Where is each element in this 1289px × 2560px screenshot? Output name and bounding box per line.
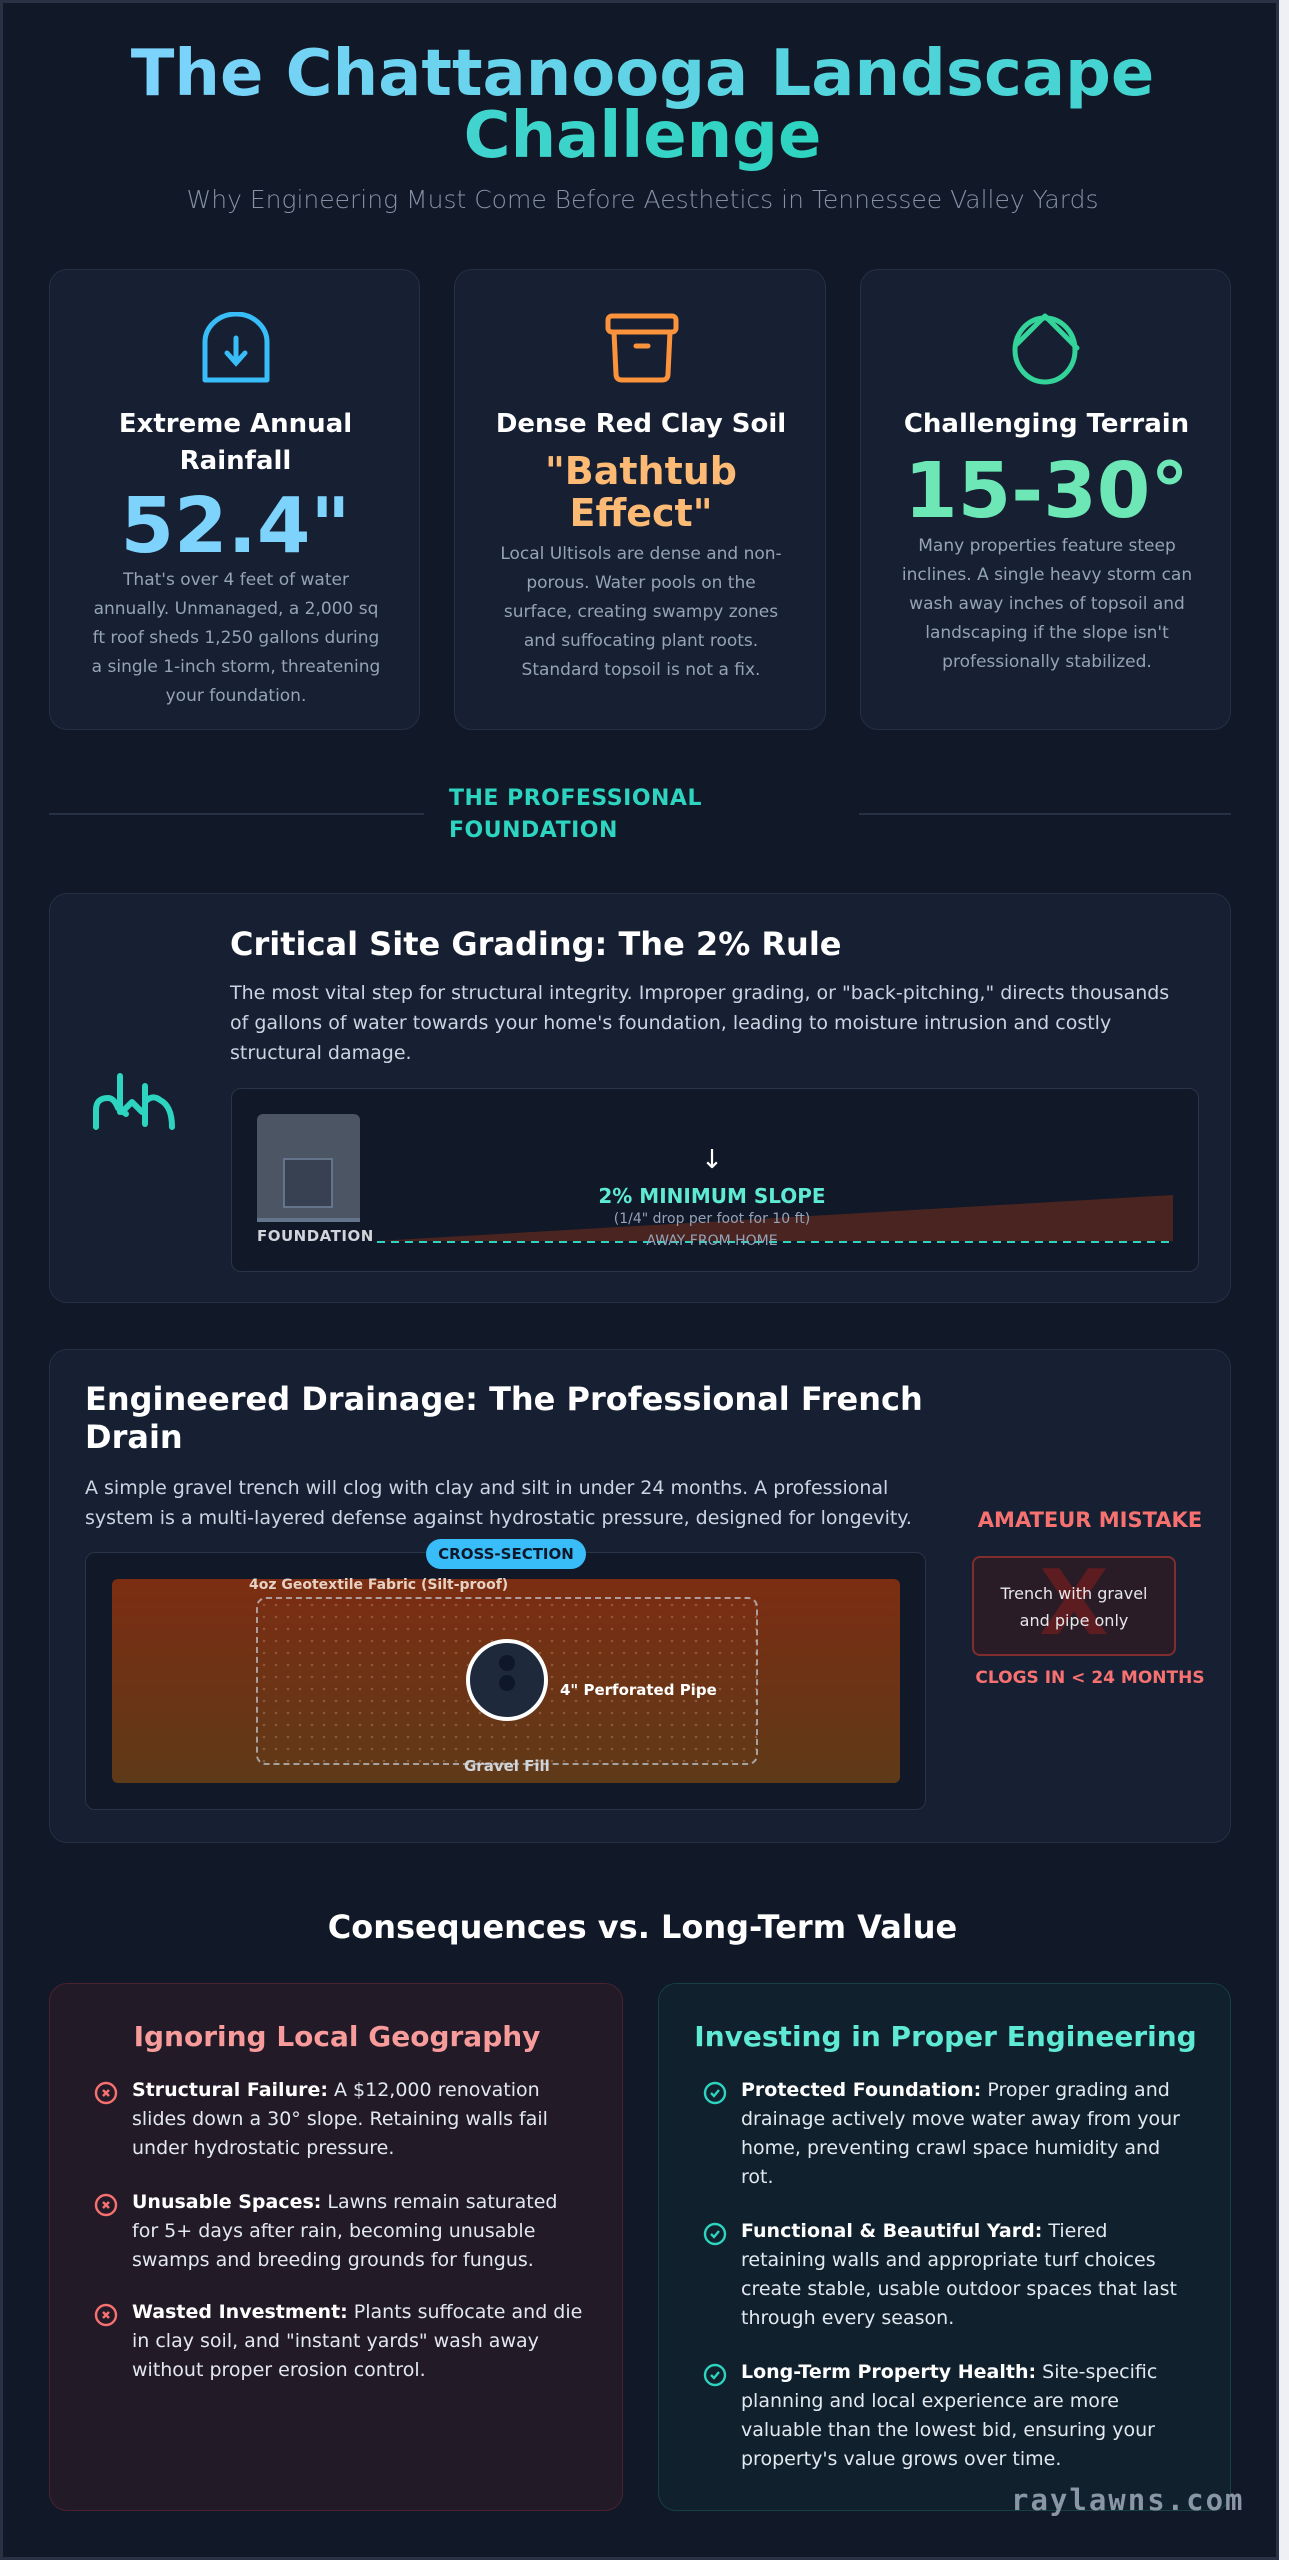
highlight: "Bathtub bbox=[545, 449, 737, 493]
panel: clay soil bbox=[454, 269, 826, 730]
description: The most vital step for structural integrity. Improper grading, or "back-pitching," directs thousands of gallons of water towards your home's foundation, leading to moisture intrusion and costly structural damage. bbox=[230, 982, 1169, 1064]
soil bbox=[112, 1579, 900, 1783]
badge bbox=[426, 1539, 586, 1569]
slope diagram bbox=[231, 1088, 1199, 1272]
panel: french drain bbox=[49, 1349, 1231, 1843]
big number: 52.4" bbox=[120, 482, 351, 571]
foundation block bbox=[257, 1114, 360, 1222]
watermark: raylawns.com bbox=[1011, 2483, 1245, 2517]
heading: Critical Site Grading: The 2% Rule bbox=[230, 925, 841, 963]
panel: proper engineering: Investing in Proper Engineering bbox=[694, 2020, 1197, 2053]
title: Challenge bbox=[464, 99, 821, 173]
description: A simple gravel trench will clog with clay and silt in under 24 months. A professional system is a multi-layered defense against hydrostatic pressure, designed for longevity. bbox=[85, 1477, 912, 1529]
icon: grading bbox=[93, 1073, 175, 1130]
heading: Extreme Annual bbox=[119, 409, 352, 439]
cross-section diagram bbox=[85, 1552, 926, 1810]
fabric label: 4oz Geotextile Fabric (Silt-proof) bbox=[249, 1577, 508, 1593]
heading: Dense Red Clay Soil bbox=[496, 409, 786, 439]
gravel label: Gravel Fill bbox=[464, 1757, 550, 1775]
section label: FOUNDATION bbox=[449, 818, 618, 843]
icon: drop circle bbox=[1012, 314, 1080, 384]
heading: Engineered Drainage: The Professional French Drain bbox=[85, 1380, 923, 1456]
panel: proper engineering bbox=[658, 1983, 1231, 2511]
item: property health: Long-Term Property Health: Site-specific planning and local experience are more valuable than the lowest bid, ensuring your property's value grows over time. bbox=[741, 2361, 1157, 2470]
subtitle: Why Engineering Must Come Before Aesthetics in Tennessee Valley Yards bbox=[187, 185, 1098, 214]
highlight: Effect" bbox=[569, 491, 712, 535]
pipe bbox=[466, 1639, 548, 1721]
amateur mistake: AMATEUR MISTAKE bbox=[978, 1508, 1202, 1532]
panel: rainfall bbox=[49, 269, 420, 730]
description: That's over 4 feet of water annually. Unmanaged, a 2,000 sq ft roof sheds 1,250 gallons during a single 1-inch storm, threatening your foundation. bbox=[92, 570, 380, 706]
mistake box bbox=[972, 1556, 1176, 1656]
slope diagram: (1/4" drop per foot for 10 ft) bbox=[614, 1211, 810, 1227]
highlight bbox=[545, 449, 737, 535]
item: protected foundation: Protected Foundation: Proper grading and drainage actively move water away from your home, preventing crawl space humidity and rot. bbox=[741, 2079, 1180, 2188]
pipe label: 4" Perforated Pipe bbox=[560, 1681, 717, 1699]
heading bbox=[119, 409, 352, 476]
panel: ignoring geography bbox=[49, 1983, 623, 2511]
item: structural failure: Structural Failure: A $12,000 renovation slides down a 30° slope. Retaining walls fail under hydrostatic pressure. bbox=[132, 2079, 548, 2159]
slope label: 2% MINIMUM SLOPE bbox=[598, 1184, 826, 1208]
description: Many properties feature steep inclines. A single heavy storm can wash away inches of topsoil and landscaping if the slope isn't professionally stabilized. bbox=[902, 536, 1192, 672]
item: unusable spaces: Unusable Spaces: Lawns remain saturated for 5+ days after rain, becoming unusable swamps and breeding grounds for fungus. bbox=[132, 2191, 557, 2271]
heading: Rainfall bbox=[180, 446, 291, 476]
badge: CROSS-SECTION bbox=[438, 1545, 574, 1563]
amateur mistake bbox=[972, 1508, 1205, 1688]
gravel box bbox=[256, 1597, 758, 1765]
slope diagram: AWAY FROM HOME bbox=[646, 1233, 778, 1249]
description: Local Ultisols are dense and non-porous. Water pools on the surface, creating swampy zones and suffocating plant roots. Standard topsoil is not a fix. bbox=[500, 544, 782, 680]
arrow down: ↓ bbox=[701, 1145, 723, 1175]
section label bbox=[449, 786, 702, 843]
panel: site grading bbox=[49, 893, 1231, 1303]
title: The Chattanooga Landscape bbox=[131, 37, 1154, 111]
big number: 15-30° bbox=[904, 447, 1189, 536]
panel: ignoring geography: Ignoring Local Geography bbox=[134, 2020, 540, 2053]
heading: Challenging Terrain bbox=[904, 409, 1189, 439]
section label: THE PROFESSIONAL bbox=[449, 786, 702, 811]
section divider bbox=[49, 786, 1231, 843]
heading: consequences: Consequences vs. Long-Term Value bbox=[328, 1908, 957, 1946]
icon: rain shelter arrow bbox=[202, 312, 270, 382]
item: functional yard: Functional & Beautiful Yard: Tiered retaining walls and appropriate turf choices create stable, usable outdoor spaces that last through every season. bbox=[741, 2220, 1177, 2329]
item: wasted investment: Wasted Investment: Plants suffocate and die in clay soil, and "instant yards" wash away without proper erosion control. bbox=[132, 2301, 582, 2381]
foundation label: FOUNDATION bbox=[257, 1227, 374, 1245]
title bbox=[131, 37, 1154, 173]
mistake box: X bbox=[1039, 1551, 1109, 1656]
icon: bucket bbox=[606, 314, 678, 382]
amateur mistake: CLOGS IN < 24 MONTHS bbox=[975, 1668, 1205, 1688]
slope wedge bbox=[377, 1195, 1173, 1243]
panel: terrain bbox=[860, 269, 1231, 730]
mistake box: Trench with gravel and pipe only bbox=[1000, 1584, 1147, 1630]
